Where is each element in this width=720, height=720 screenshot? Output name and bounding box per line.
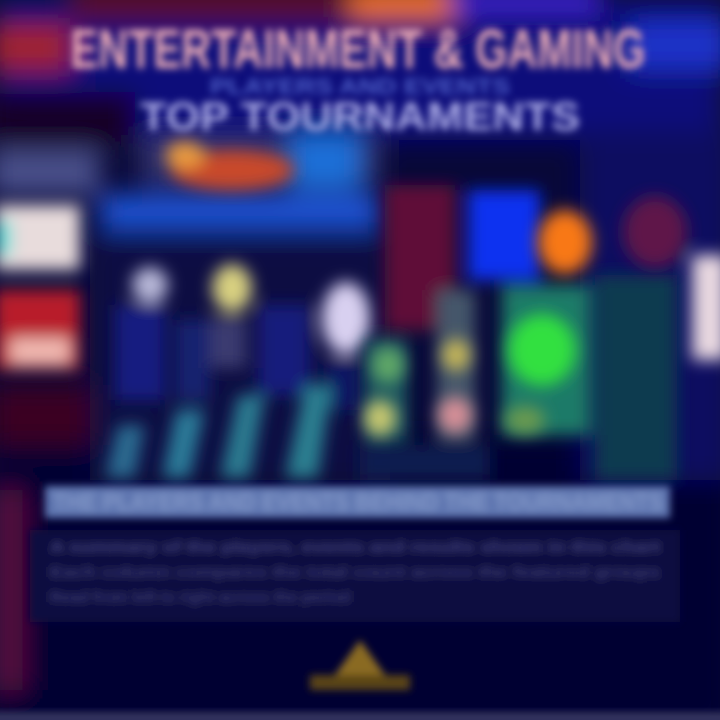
panel: summary text (30, 530, 680, 622)
title: PLAYERS AND EVENTS (210, 74, 510, 99)
chart: player columns (105, 264, 370, 478)
icon: gold logo (310, 640, 410, 690)
title: TOP TOURNAMENTS (140, 95, 580, 139)
icons: coloured badges (364, 196, 720, 436)
chart: centre and right tall panels (360, 185, 677, 480)
column figures (115, 305, 360, 410)
column heads (132, 264, 370, 368)
panel: summary text: Each column compares the total count across the featured groups (50, 564, 660, 581)
panel: left screens (0, 205, 80, 370)
icon: orange emblem (165, 141, 294, 190)
panel: summary banner (30, 486, 680, 622)
panel: summary banner: THE PLAYERS AND EVENTS BEHIND THE TOURNAMENTS (53, 489, 663, 516)
panel: summary text: A summary of the players, events and results shown in this chart (50, 539, 660, 556)
title (70, 17, 646, 139)
panel: summary text: Read from left to right across the period (50, 589, 350, 606)
column bases (105, 385, 332, 478)
footer strip (0, 712, 720, 720)
